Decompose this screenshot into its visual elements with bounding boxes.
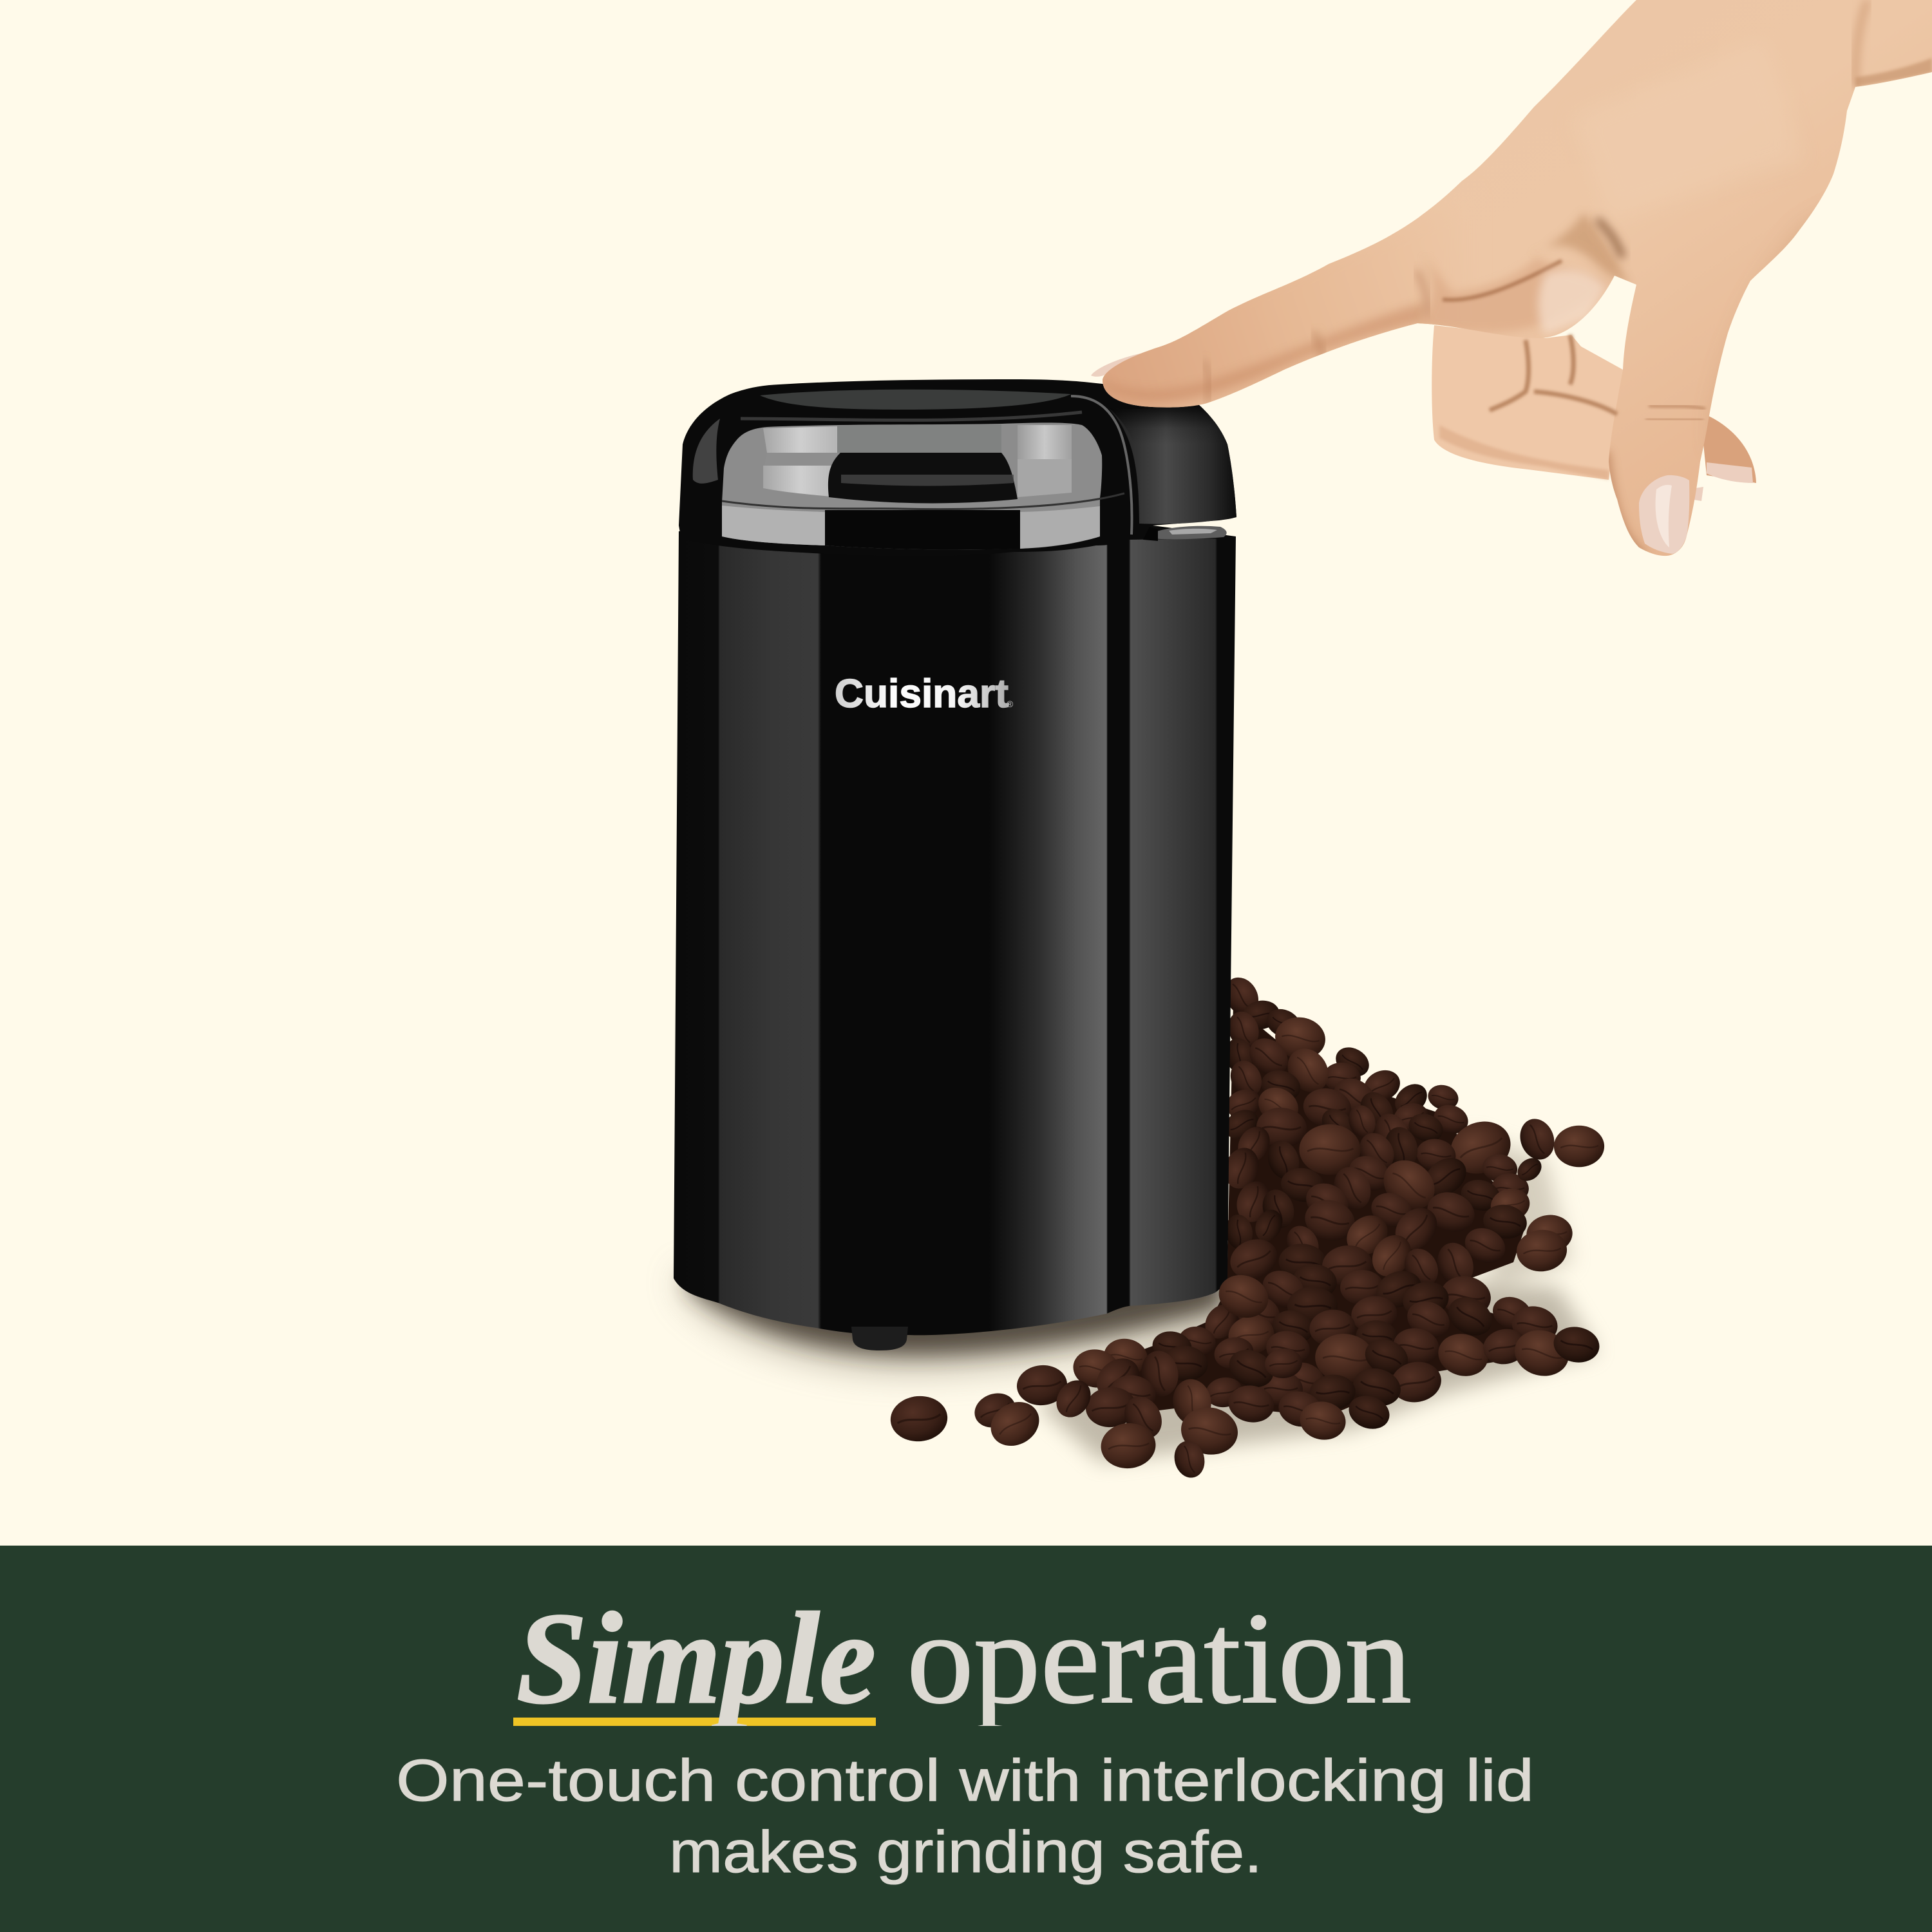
clear dome seam bbox=[1071, 396, 1132, 535]
description line one: One-touch control with interlocking lid bbox=[396, 1748, 1534, 1814]
heading underline bbox=[513, 1718, 876, 1726]
dome left upper panel bbox=[763, 426, 837, 453]
hand bbox=[1082, 0, 1932, 560]
cream background bbox=[0, 0, 1932, 1546]
dome left lower panel bbox=[763, 466, 837, 497]
ground shadows bbox=[679, 1133, 1597, 1462]
dome top centre panel bbox=[837, 424, 1001, 453]
lid glossy ridge bbox=[741, 412, 1082, 420]
lid outer shell bbox=[679, 379, 1236, 556]
description line two: makes grinding safe. bbox=[669, 1819, 1262, 1885]
grinder body bbox=[674, 531, 1236, 1350]
dome lower left band bbox=[722, 506, 825, 545]
heading: Simple bbox=[516, 1586, 876, 1730]
back fingertip bbox=[1700, 412, 1756, 483]
small fingernail bbox=[1694, 487, 1703, 501]
dome lower right band bbox=[1020, 506, 1100, 549]
index fingernail bbox=[1091, 352, 1153, 377]
brand logo: ® bbox=[1007, 699, 1014, 709]
grinder lid bbox=[679, 379, 1236, 556]
hand and index finger bbox=[1103, 0, 1932, 556]
dome right panel bbox=[1018, 425, 1072, 459]
grinder foot bbox=[851, 1327, 908, 1350]
curled finger creases bbox=[1439, 335, 1617, 480]
middle fingernail bbox=[1639, 475, 1689, 554]
clear dome bbox=[722, 422, 1102, 549]
nail highlight bbox=[1656, 485, 1672, 547]
dome right lower panel bbox=[1018, 459, 1072, 497]
back fingernail bbox=[1707, 462, 1753, 483]
dome left middle band bbox=[764, 453, 837, 466]
bean against base bbox=[1213, 1268, 1274, 1325]
dome centre reflection bbox=[841, 475, 1014, 486]
curled fingers bbox=[1432, 325, 1623, 480]
control cap bbox=[1108, 404, 1236, 524]
lid top inner surface bbox=[760, 390, 1071, 410]
heading second word: operation bbox=[907, 1586, 1412, 1730]
dome dark centre bbox=[828, 453, 1018, 503]
scattered coffee beans bbox=[889, 1114, 1604, 1481]
hand shading bbox=[1082, 0, 1932, 560]
brand logo: Cuisinart bbox=[835, 672, 1009, 716]
dome lower dark centre bbox=[825, 510, 1020, 549]
lid left gloss bbox=[693, 419, 720, 484]
green caption panel bbox=[0, 1546, 1932, 1932]
hinge detail bbox=[1150, 526, 1227, 539]
coffee bean pile bbox=[1070, 971, 1602, 1443]
dome ring line bbox=[722, 493, 1124, 509]
